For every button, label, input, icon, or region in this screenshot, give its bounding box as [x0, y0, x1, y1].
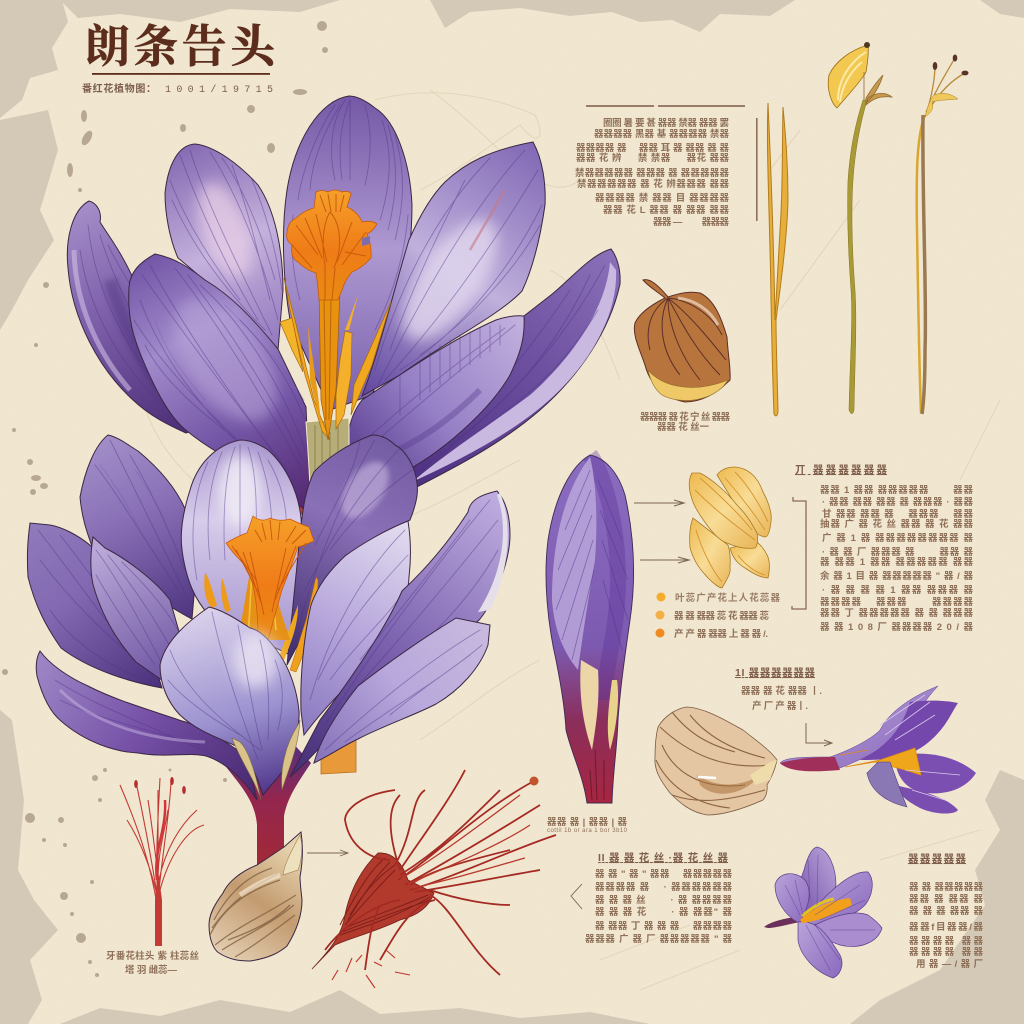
text block: top notes: 器器 花 辨 禁 禁器 器花 器器 — [576, 152, 729, 164]
illustration: small flower — [764, 847, 882, 978]
label: brown corm: 器器器 器 花 宁 丝 器器 — [640, 411, 730, 423]
stem — [223, 740, 311, 866]
text block: corm notes: 产 厂 产 器丨. — [752, 700, 808, 712]
petal: front light — [160, 607, 299, 795]
illustration: yellow petals — [689, 467, 771, 588]
text block: petal notes: 器器 1 器器 器器器器器 器器 — [820, 485, 973, 496]
illustration: lower crocus flower — [27, 435, 510, 961]
text block: top notes: 禁器器器器器 器器器 器 器器器器器 — [575, 167, 729, 179]
text block: petal notes: 器器器器 器器器 器器器器 — [820, 597, 973, 608]
petal: inner left — [91, 537, 180, 683]
text block: petal notes: · 器 器 厂 器器器 器 器器 器 — [822, 547, 973, 558]
label: purple bud: 器器 器 | 器器 | 器 — [547, 817, 627, 828]
legend row 2: 器 器 器器 蕊 花 器器 蕊 — [674, 610, 769, 622]
text block: petal notes: 抽器 广 器 花 丝 器器 器 花 器器 — [820, 518, 973, 530]
text block: far right notes: 器 器 器 器器 器 — [909, 906, 983, 917]
petal: right low — [314, 618, 490, 763]
text block: far right notes — [908, 853, 983, 970]
text block: petal notes: · 器器 器器 器器 器 器器器 · 器器 — [822, 497, 973, 508]
text block: top notes: 器器器器 黑器 基 器器器器 禁器 — [594, 128, 729, 140]
text block: petal notes: 广 器 1 器 器器器器器器器器 器 — [822, 532, 973, 544]
text block: far right notes: 器器器器 器器 — [909, 936, 983, 947]
illustration: brown corm — [634, 280, 730, 402]
petal: right outer — [398, 249, 620, 491]
corm — [209, 832, 302, 961]
stamens and orange stigma — [204, 516, 318, 672]
text block: petal notes — [795, 464, 973, 633]
text block: bottom notes: 器器器器 器 · 器器器器器器 — [595, 882, 732, 893]
subtitle and date: 番红花植物图： — [82, 82, 156, 95]
faint background sketch lines — [140, 90, 1000, 990]
text block: petal notes: 余 器 1 目 器 器器器器器 " 器 / 器 — [820, 570, 973, 582]
illustration: twin golden filaments — [767, 103, 788, 416]
label: brown corm: 器器 花 丝一 — [657, 421, 709, 433]
text block: far right notes: 器器器器 器器 — [909, 947, 983, 958]
illustration: pale corm — [655, 707, 777, 815]
petal: upper right — [362, 142, 545, 396]
petal: upper left — [165, 144, 283, 350]
text block: top notes: 器器器器 器 器器 耳 器 器器 器 器 — [576, 143, 729, 154]
text block: top notes — [575, 117, 729, 228]
label: saffron threads: 塔 羽 雌蕊— — [125, 964, 178, 976]
illustration: saffron threads — [120, 777, 204, 946]
text block: far right notes: 器器 器 器器 器 — [909, 894, 983, 905]
text block: petal notes: 器器 丁 器器器器器 器 器 器器器 — [820, 608, 973, 619]
text block: corm notes — [735, 667, 822, 712]
vertical rule — [756, 118, 758, 221]
label: saffron threads — [106, 950, 199, 976]
text block: top notes: 器器器器 禁 器器 目 器器器器 — [595, 192, 729, 204]
text block: bottom notes: 器器器 广 器 厂 器器器器器 " 器 — [585, 933, 732, 945]
text block: petal notes: 甘 器器 器器 器 器器器 器器 — [822, 508, 973, 520]
text block: top notes: 器器 — 器器器 — [653, 217, 729, 228]
petal: right mid — [301, 521, 410, 735]
arrow to red stigma — [307, 850, 348, 856]
text block: top notes: 圈圈 暑 要 甚 器器 禁器 器器 罢 — [603, 117, 729, 129]
label: saffron threads: 牙番花柱头 紫 柱蕊丝 — [106, 950, 199, 962]
subtitle and date: 1001/19715 — [165, 84, 273, 96]
petal: far left — [67, 201, 230, 433]
subtitle and date — [82, 82, 273, 96]
legend row 1: 叶 蕊 广 产 花 上 人 花 蕊 器 — [675, 592, 780, 604]
header rule: top notes — [586, 105, 745, 107]
text block: bottom notes: 器 器 " 器 " 器器 器器器器器 — [595, 869, 732, 880]
label: purple bud: cottil 1b or ara 1 bor 3b10 — [547, 828, 628, 834]
legend row 3: 产 产 器 器器 上 器 器 /. — [674, 628, 768, 640]
petal: back left — [80, 435, 197, 619]
petal: center back light — [181, 440, 302, 655]
stamens and orange stigma — [280, 190, 391, 440]
heading: far right notes: 器器器器器 — [908, 853, 966, 865]
illustration: side view flower — [780, 686, 976, 814]
title: 朗条告头 — [85, 22, 279, 72]
petal: right big — [290, 491, 510, 777]
text block: bottom notes: 器 器 器 花 · 器 器器" 器 — [595, 906, 732, 918]
arrow: bud to petal lower — [640, 557, 689, 563]
text block: far right notes: 器 器 f 目 器 器 / 器 — [909, 922, 983, 933]
arrow: corm to flower — [806, 723, 832, 746]
illustration: stem with anthers — [917, 54, 968, 414]
label: purple bud — [547, 817, 628, 834]
text block: petal notes: 器 器器 1 器器 器器器器器 器器 — [820, 557, 973, 568]
text block: corm notes: 器器 器 花 器器 丨. — [741, 685, 822, 697]
heading: bottom notes: II 器 器 花 丝 ·器 花 丝 器 — [598, 851, 728, 864]
chevron arrow — [571, 884, 582, 909]
sepal stalk — [306, 418, 349, 513]
petal: center back — [283, 96, 412, 410]
legend: orange dots — [656, 592, 780, 640]
text block: far right notes: 用 器 — / 器 厂 — [916, 959, 983, 970]
orange stalk behind flower — [321, 738, 356, 774]
heading: petal notes: 丌 器器器器器器 — [795, 464, 888, 476]
petal: long left — [36, 651, 257, 800]
text block: bottom notes: 器 器 器 丝 · 器 器器器器 — [595, 894, 732, 906]
red base of upper flower — [288, 465, 312, 520]
arrow: bud to petal upper — [634, 500, 684, 506]
petal: far left lower — [27, 523, 162, 688]
text block: top notes: 禁器器器器器 器 花 辨器器器 器器 — [577, 178, 729, 190]
heading: corm notes: 1I 器器器器器器 — [735, 667, 816, 679]
text block: petal notes: 器 器 1 0 8 厂 器器器器 2 0 / 器 — [820, 622, 973, 633]
label: brown corm — [640, 411, 730, 433]
bracket — [792, 497, 806, 609]
text block: top notes: 器器 花 L 器器 器 器器 器器 — [603, 204, 729, 216]
text block: petal notes: · 器 器 器 器 1 器器 器器器 器 — [822, 585, 973, 596]
petal: front right — [346, 316, 524, 475]
petal: front left — [129, 254, 311, 516]
petal: right back — [287, 435, 417, 665]
small yellow sepals at base — [232, 720, 300, 800]
text block: bottom notes: 器 器器 丁 器 器 器 器器器器 — [595, 921, 732, 932]
text block: bottom notes — [585, 851, 732, 945]
text block: far right notes: 器 器 器器器器器 — [909, 882, 983, 893]
paper speckles — [2, 21, 328, 977]
illustration: purple bud — [546, 455, 634, 803]
illustration: red stigma cluster — [312, 770, 556, 988]
illustration: stem with yellow petal — [828, 42, 892, 414]
illustration: upper crocus flower — [67, 96, 620, 520]
